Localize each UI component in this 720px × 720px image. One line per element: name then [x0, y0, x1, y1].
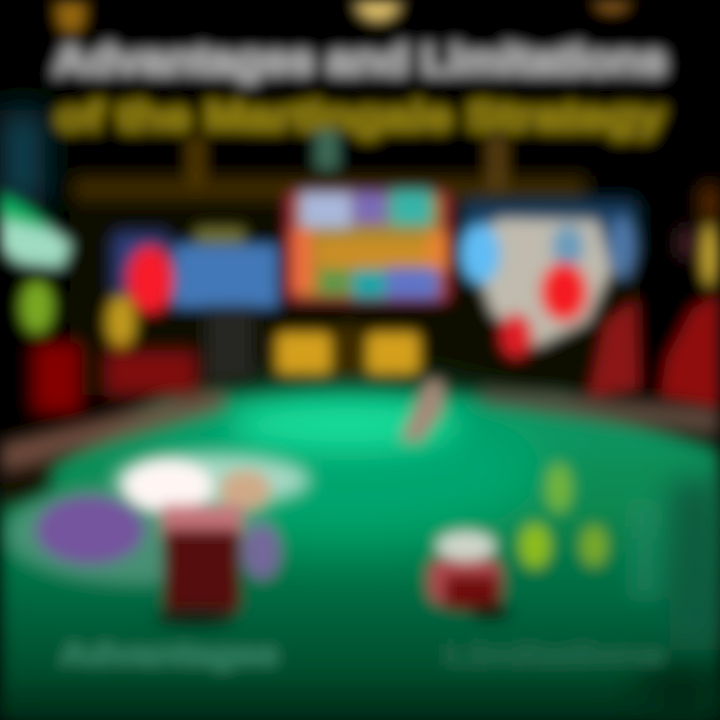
- title: Advantages and Limitations: [54, 37, 666, 83]
- panel: central colourful board: [286, 190, 450, 302]
- panel: red and blue card: [104, 228, 278, 396]
- top lights: [56, 0, 630, 34]
- hand pointer: [400, 378, 444, 442]
- subtitle: of the Martingale Strategy: [56, 93, 664, 139]
- right red columns: [588, 223, 720, 408]
- left stack of chips: [114, 454, 310, 627]
- green triangle of chips: [519, 463, 608, 569]
- caption line: [72, 130, 587, 202]
- right table label: Limitations: [445, 639, 665, 670]
- right table marking: [628, 500, 662, 600]
- table rail: [0, 388, 720, 510]
- table felt: [0, 395, 720, 720]
- purple betting circle: [5, 485, 281, 585]
- left table label: Advantages: [60, 638, 278, 671]
- centre yellow squares: [276, 325, 420, 375]
- left green lamp: [0, 192, 82, 414]
- backdrop glow: [0, 110, 720, 395]
- panel: white and red card: [460, 200, 637, 358]
- right stack of chips: [428, 531, 510, 620]
